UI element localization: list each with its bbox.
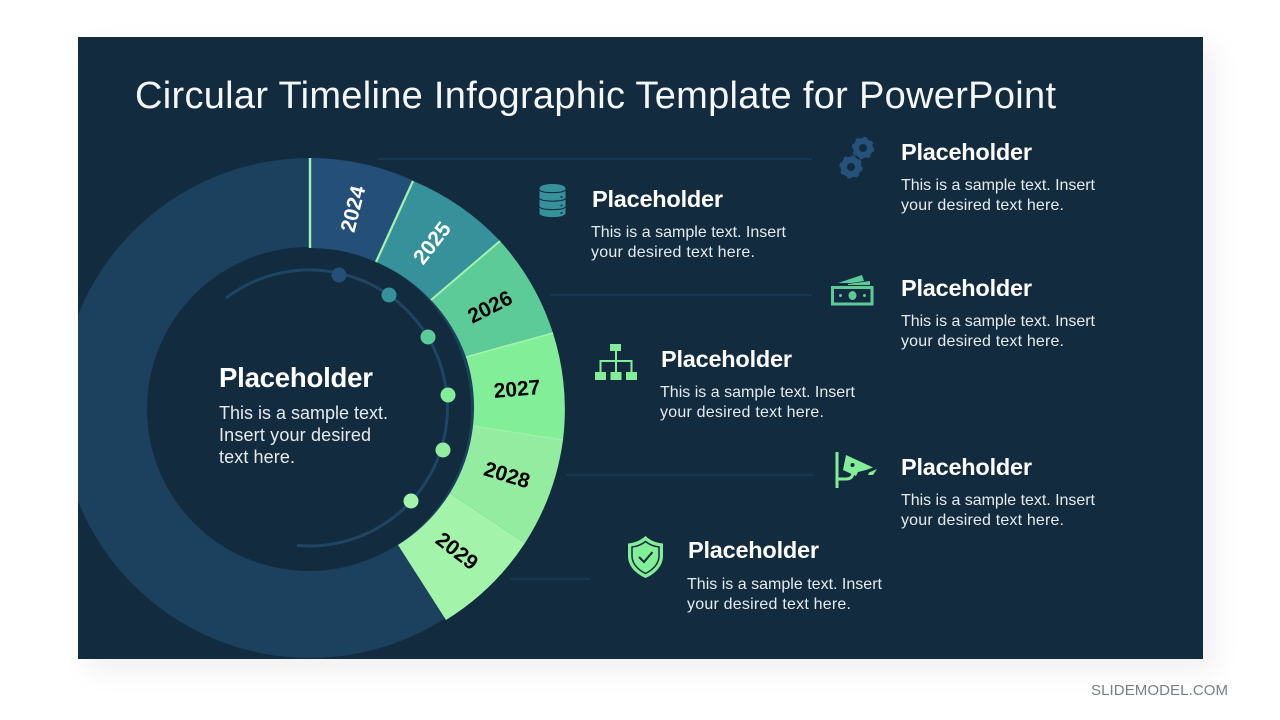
text block: money item: Placeholder xyxy=(901,275,1032,301)
progress dots xyxy=(332,268,456,508)
text block: camera item: your desired text here. xyxy=(901,512,1064,529)
connector lines xyxy=(378,159,813,579)
segment 2025 xyxy=(376,181,500,300)
text block: database item: your desired text here. xyxy=(591,244,755,261)
text block: database item xyxy=(591,186,787,261)
circular timeline ring xyxy=(60,158,565,658)
text block: org chart item: Placeholder xyxy=(661,346,792,372)
center text block: This is a sample text. xyxy=(219,403,388,423)
center text block xyxy=(219,362,388,467)
icon: org chart xyxy=(595,344,637,380)
text block: money item: This is a sample text. Insert xyxy=(901,313,1096,330)
segment 2026 xyxy=(431,241,553,357)
text block: org chart item: This is a sample text. Insert xyxy=(660,384,856,401)
year label 2024: 2024 xyxy=(337,183,370,235)
text block: shield item: your desired text here. xyxy=(687,596,851,613)
icon: money xyxy=(832,275,872,304)
segment separators xyxy=(310,158,563,440)
text block: camera item: Placeholder xyxy=(901,454,1032,480)
text block: gears item xyxy=(901,139,1096,214)
text block: org chart item xyxy=(660,346,856,421)
text block: shield item xyxy=(687,537,883,613)
year label 2027: 2027 xyxy=(493,376,541,403)
center text block: Insert your desired xyxy=(219,425,371,445)
center text block: Placeholder xyxy=(219,362,373,393)
slide background xyxy=(78,37,1203,659)
text block: database item: This is a sample text. Insert xyxy=(591,224,787,241)
text block: database item: Placeholder xyxy=(592,186,723,212)
icon: gears xyxy=(841,138,873,177)
title: Circular Timeline Infographic Template for PowerPoint xyxy=(135,75,1056,117)
text block: shield item: Placeholder xyxy=(688,537,819,563)
icon: security camera xyxy=(836,452,877,488)
segment 2024 xyxy=(310,158,413,262)
text block: money item: your desired text here. xyxy=(901,333,1064,350)
segment 2027 xyxy=(466,333,565,440)
segment 2029 xyxy=(398,493,525,620)
year label 2029: 2029 xyxy=(431,528,482,575)
footer brand: SLIDEMODEL.COM xyxy=(1091,682,1228,699)
year label 2025: 2025 xyxy=(409,218,456,269)
text block: gears item: Placeholder xyxy=(901,139,1032,165)
icon: database xyxy=(540,184,566,217)
text block: camera item xyxy=(901,454,1096,529)
inner progress arc xyxy=(226,270,447,546)
segment 2028 xyxy=(450,426,563,543)
text block: shield item: This is a sample text. Insert xyxy=(687,576,883,593)
text block: gears item: your desired text here. xyxy=(901,197,1064,214)
text block: camera item: This is a sample text. Insert xyxy=(901,492,1096,509)
text block: org chart item: your desired text here. xyxy=(660,404,824,421)
year label 2026: 2026 xyxy=(464,287,516,328)
center text block: text here. xyxy=(219,447,295,467)
text block: money item xyxy=(901,275,1096,350)
year label 2028: 2028 xyxy=(481,458,533,493)
icon: shield xyxy=(628,536,663,578)
text block: gears item: This is a sample text. Insert xyxy=(901,177,1096,194)
